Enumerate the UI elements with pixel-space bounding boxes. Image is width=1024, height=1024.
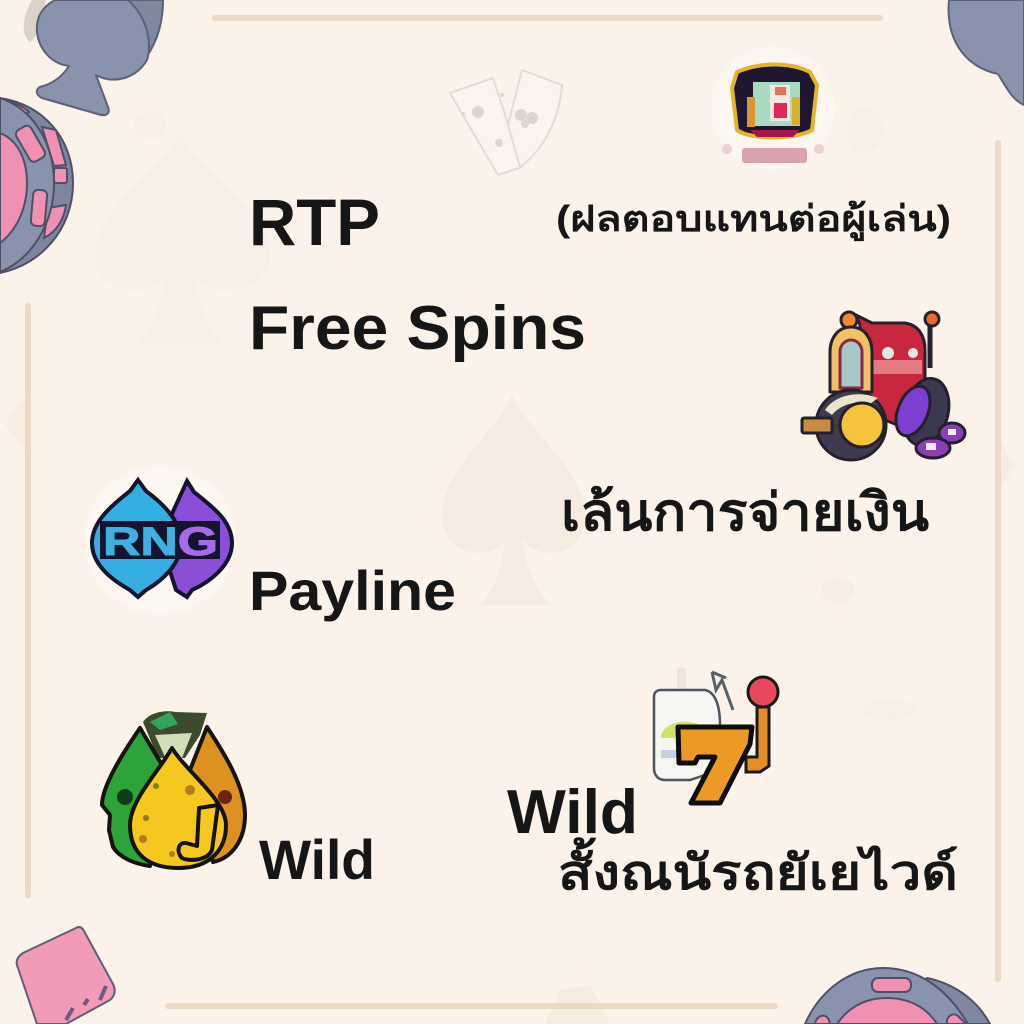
heading: Payline: Payline [249, 559, 456, 622]
text: Thai pay label: เล้นการจ่ายเงิน [561, 484, 929, 542]
icon: left poker chip [0, 98, 73, 273]
icon: RNG badge [85, 465, 235, 615]
icon: bottom-left pink card [17, 927, 115, 1024]
icon: lucky seven slot [654, 668, 778, 803]
text: Thai wild description: สั้งณนัรถยัเยไวด์ [558, 837, 958, 900]
frame bar: left [25, 303, 31, 898]
heading: Wild right: Wild [507, 778, 638, 847]
icon: top-right spade [949, 0, 1024, 105]
icon: top-left spade [24, 0, 163, 115]
icon: playing cards watermark [450, 70, 562, 175]
frame bar: bottom [165, 1003, 778, 1009]
icon: RNG badge: RN G [103, 520, 218, 564]
heading: RTP: RTP [249, 185, 380, 259]
icon: bottom-right poker chip [805, 968, 990, 1024]
frame bar: top [212, 15, 883, 21]
icon: green and yellow drops [102, 711, 245, 868]
heading: Free Spins: Free Spins [249, 294, 586, 363]
heading: Thai RTP meaning: (ฝลตอบแทนต่อผู้เล่น) [556, 198, 951, 242]
icon: red slot machine and coins [802, 312, 965, 460]
frame bar: right [995, 140, 1001, 982]
icon: slot machine badge [711, 46, 835, 170]
heading: Wild left: Wild [259, 828, 375, 891]
